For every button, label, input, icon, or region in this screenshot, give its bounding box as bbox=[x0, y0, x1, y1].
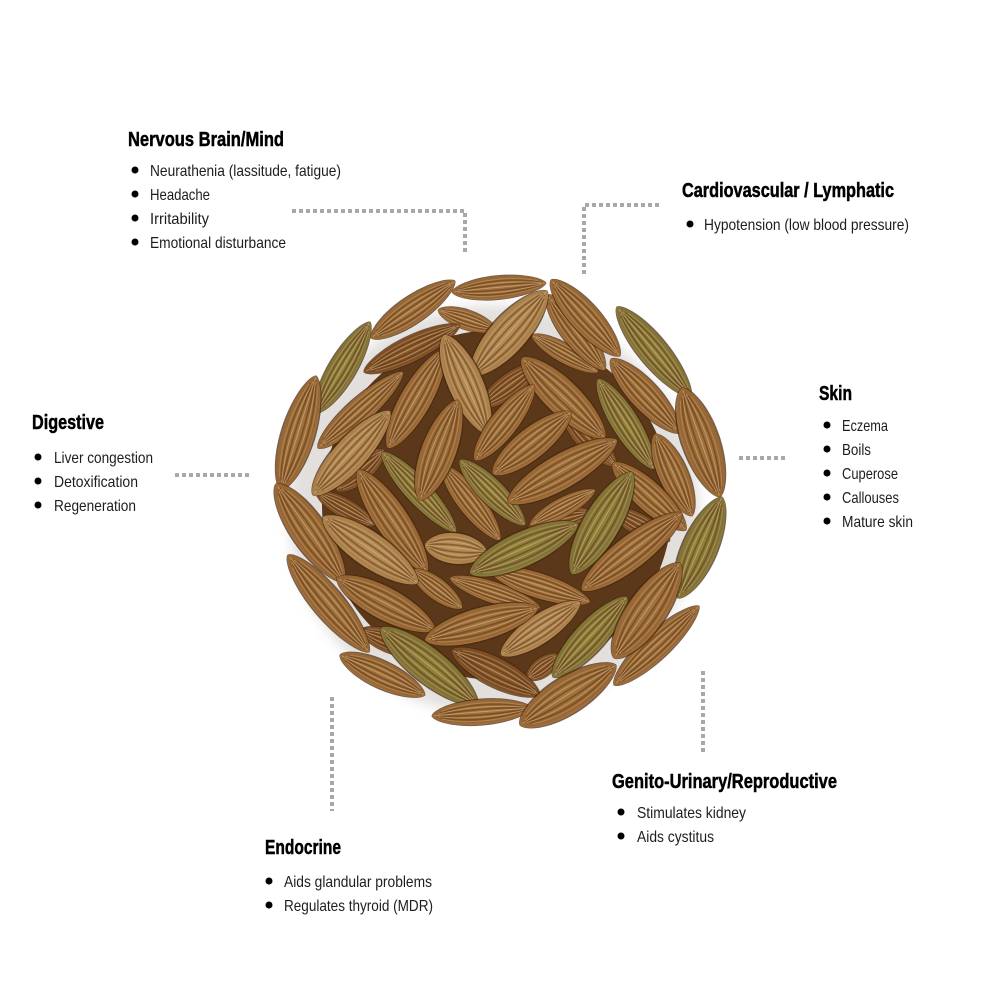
panel: skin bbox=[819, 383, 913, 531]
list bbox=[266, 874, 433, 915]
list: Aids cystitus bbox=[637, 829, 714, 846]
list: Stimulates kidney bbox=[637, 805, 746, 822]
list: Hypotension (low blood pressure) bbox=[704, 217, 909, 234]
heading: Digestive bbox=[32, 412, 104, 434]
list: Mature skin bbox=[842, 514, 913, 531]
list: Detoxification bbox=[54, 474, 138, 491]
photo: pile of brown seeds bbox=[260, 269, 739, 742]
list bbox=[132, 163, 341, 252]
list: Aids glandular problems bbox=[284, 874, 432, 891]
heading: Skin bbox=[819, 383, 852, 405]
connector: skin bbox=[739, 456, 788, 460]
panel: cardiovascular / lymphatic bbox=[682, 180, 909, 234]
panel: digestive bbox=[32, 412, 153, 515]
list: Regulates thyroid (MDR) bbox=[284, 898, 433, 915]
list: Callouses bbox=[842, 490, 899, 507]
connector: genito-urinary bbox=[701, 671, 705, 752]
list: Eczema bbox=[842, 418, 888, 435]
list: Neurathenia (lassitude, fatigue) bbox=[150, 163, 341, 180]
heading: Endocrine bbox=[265, 837, 341, 859]
list: Emotional disturbance bbox=[150, 235, 286, 252]
heading: Cardiovascular / Lymphatic bbox=[682, 180, 894, 202]
list: Boils bbox=[842, 442, 871, 459]
heading: Nervous Brain/Mind bbox=[128, 129, 284, 151]
list: Cuperose bbox=[842, 466, 898, 483]
panel: genito-urinary/reproductive bbox=[612, 771, 837, 846]
heading: Genito-Urinary/Reproductive bbox=[612, 771, 837, 793]
connector: cardiovascular bbox=[584, 205, 659, 277]
list: Liver congestion bbox=[54, 450, 153, 467]
list: Headache bbox=[150, 187, 210, 204]
list: Irritability bbox=[150, 211, 209, 228]
connector: digestive bbox=[175, 473, 251, 477]
list: Regeneration bbox=[54, 498, 136, 515]
connector: endocrine bbox=[330, 697, 334, 811]
panel: endocrine bbox=[265, 837, 433, 915]
panel: nervous brain/mind bbox=[128, 129, 341, 252]
list bbox=[34, 450, 153, 515]
list bbox=[618, 805, 746, 846]
connector: nervous bbox=[292, 211, 465, 253]
list bbox=[824, 418, 913, 531]
